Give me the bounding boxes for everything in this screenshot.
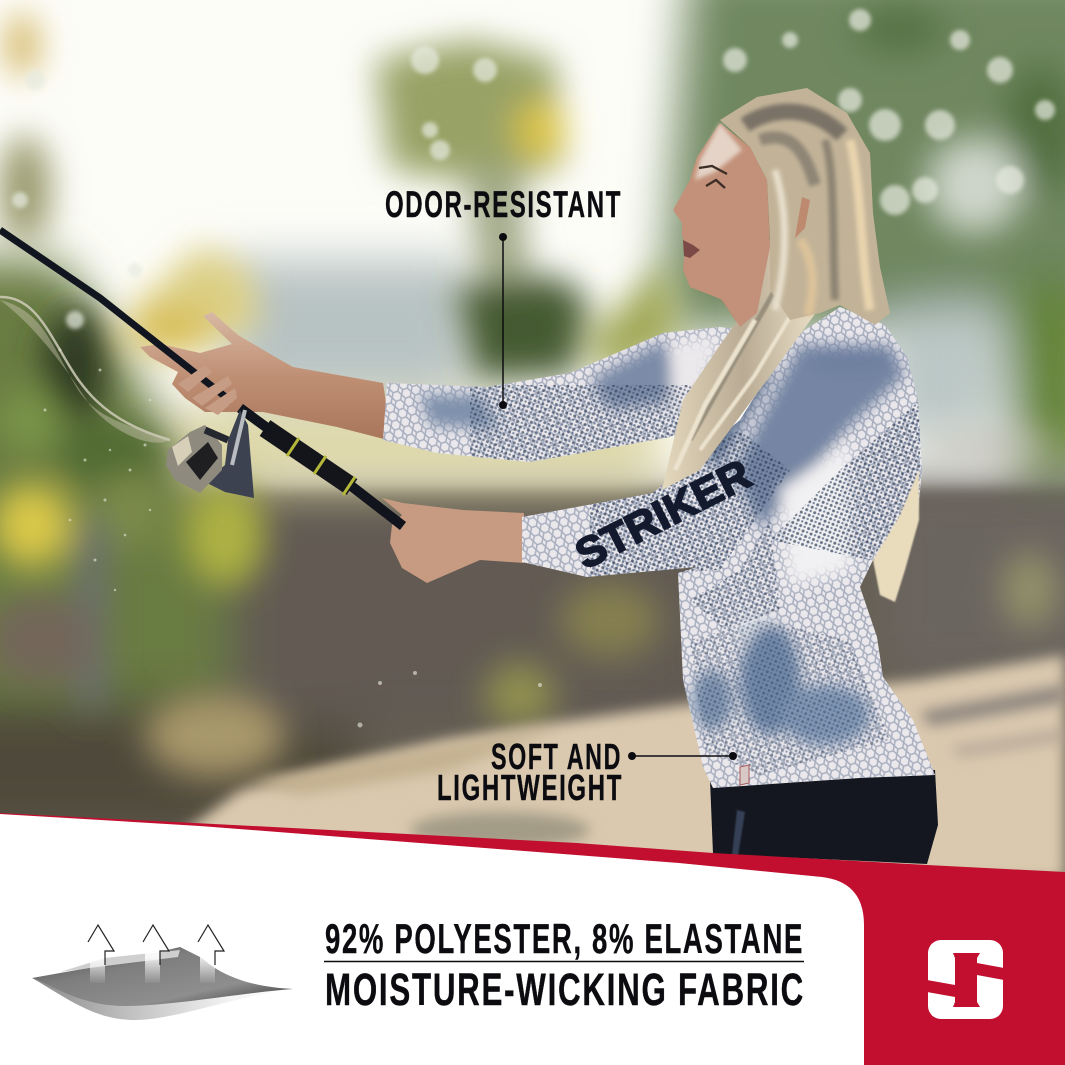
fishing rod and reel: [0, 230, 403, 526]
moisture arrow 2: [143, 925, 169, 983]
red swoosh footer band: [0, 813, 1065, 1065]
moisture arrow 1: [88, 925, 114, 983]
rod blank: [0, 230, 232, 402]
bare front forearm and hand: [382, 498, 524, 583]
mouth: [683, 240, 700, 258]
face in profile: [673, 123, 770, 327]
fabric composition heading: 92% POLYESTER, 8% ELASTANE: [325, 915, 804, 962]
bare rear forearm and hand: [140, 312, 392, 441]
shirt care tag: [740, 765, 749, 785]
callout: soft and lightweight: SOFT AND: [491, 736, 622, 777]
fingers wrapping rod: [178, 365, 237, 415]
long-sleeve patterned shirt: [383, 307, 935, 788]
fishing line and water spray: [0, 297, 542, 728]
callout: odor-resistant: [385, 184, 622, 409]
moisture-wicking heading: MOISTURE-WICKING FABRIC: [325, 964, 805, 1015]
callout: soft and lightweight: LIGHTWEIGHT: [437, 767, 623, 808]
eye and eyebrow: [699, 166, 727, 188]
cork grip: [265, 428, 352, 487]
logo: Striker S: [927, 940, 1004, 1019]
callout: soft and lightweight: [437, 736, 737, 808]
gravel path: [120, 655, 1065, 880]
moisture arrow 3: [198, 925, 224, 983]
hair tail over the shirt: [873, 470, 919, 602]
leggings highlight: [732, 810, 745, 856]
callout: odor-resistant: ODOR-RESISTANT: [385, 184, 622, 225]
angler: [140, 88, 950, 864]
ear: [795, 197, 810, 238]
head hair: [720, 88, 890, 325]
spinning reel: [166, 410, 254, 498]
sleeve lettering: STRIKER: [568, 450, 758, 578]
neck: [710, 250, 770, 335]
white info panel: [0, 814, 864, 1065]
front hair strands over shoulder: [662, 240, 825, 490]
icon: fabric with rising moisture arrows: [32, 925, 293, 1020]
leggings: [710, 770, 938, 864]
